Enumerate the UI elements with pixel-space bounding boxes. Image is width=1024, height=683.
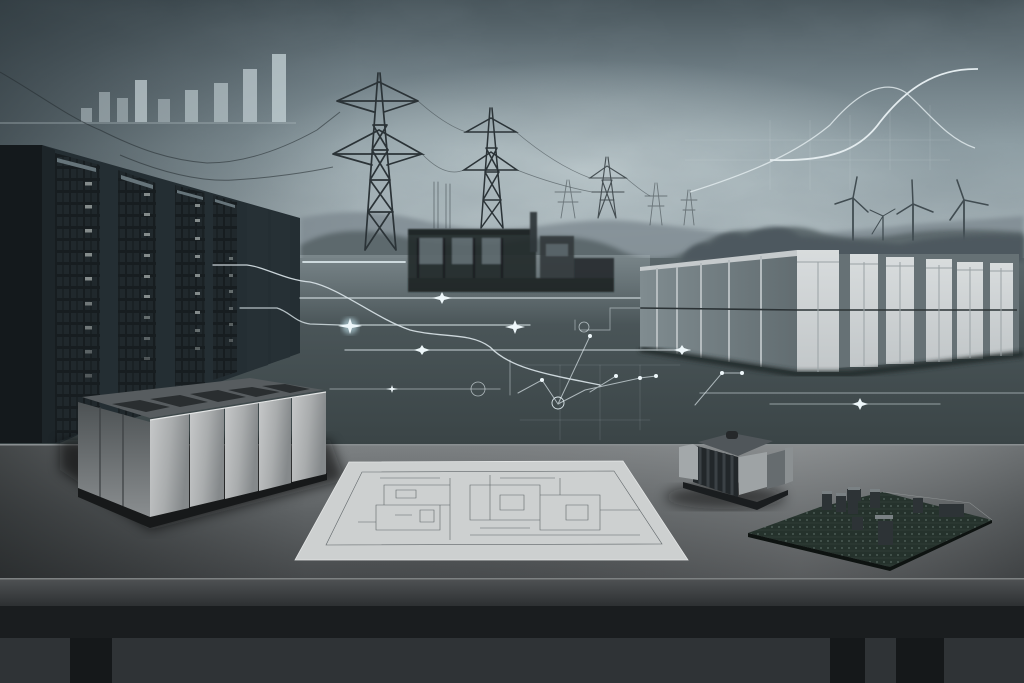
line chart: top right curves <box>685 69 978 192</box>
background: misty sky <box>0 0 1024 445</box>
icon: battery module <box>60 378 345 530</box>
icon: transformer <box>665 431 793 510</box>
pylons distant <box>434 180 697 228</box>
container fronts <box>797 250 839 372</box>
blueprint sheet <box>295 461 688 560</box>
wind turbines <box>835 177 988 240</box>
power plant building <box>408 212 614 292</box>
power lines <box>418 101 650 196</box>
rack LEDs <box>85 182 233 378</box>
energy flow lines <box>213 262 1024 440</box>
table top <box>0 444 1024 683</box>
ground field <box>0 258 1024 446</box>
battery containers <box>640 250 1024 374</box>
icon: circuit board <box>748 487 992 571</box>
pylon medium <box>464 108 517 228</box>
trees <box>680 227 1024 262</box>
pylon small <box>590 157 626 218</box>
distant treeline <box>300 212 1024 300</box>
server racks <box>0 145 300 443</box>
pylon large <box>333 73 422 250</box>
rack door panels <box>55 153 100 443</box>
bar chart: top left <box>0 54 340 180</box>
capacitors and chips <box>822 489 964 545</box>
transformer base <box>683 482 788 510</box>
glow nodes <box>338 292 868 410</box>
pylons: transmission towers <box>333 73 697 250</box>
ground mist <box>290 255 650 325</box>
rack header strips <box>57 158 235 208</box>
container side <box>640 252 797 372</box>
